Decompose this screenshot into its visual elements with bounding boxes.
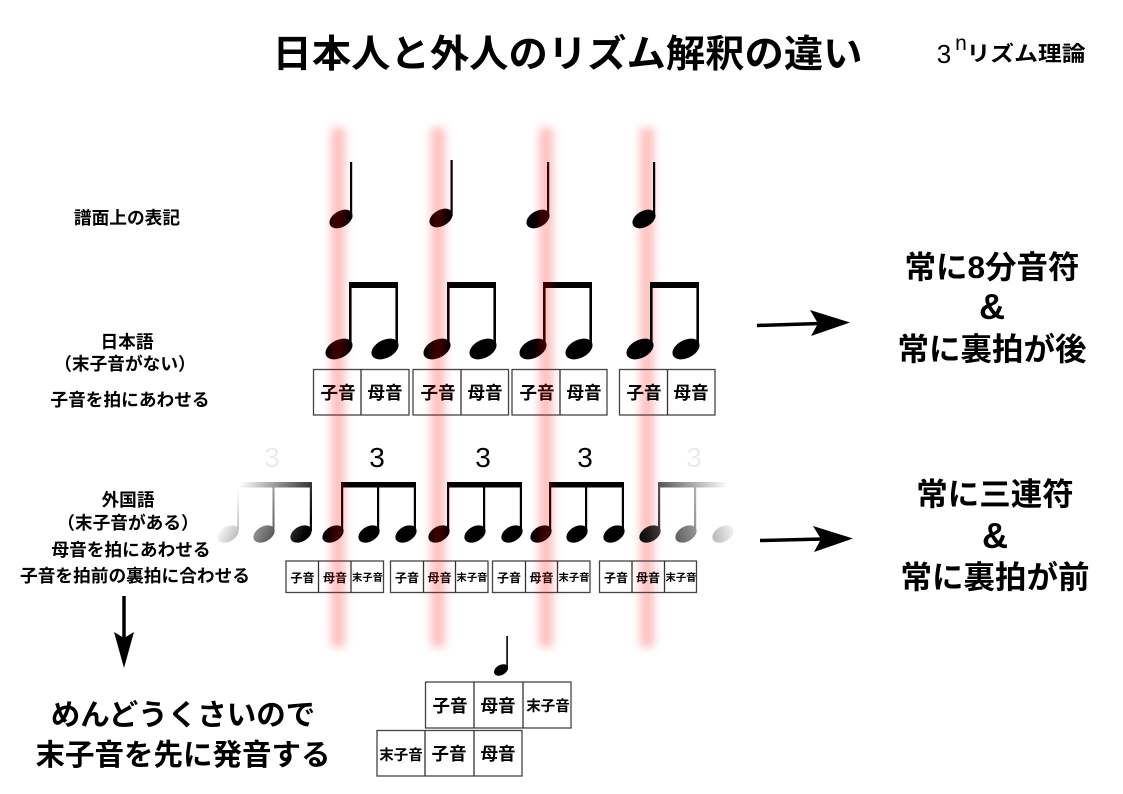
label: notation on score: 譜面上の表記 xyxy=(74,208,180,228)
syllable boxes: foreign languages: 末子音 xyxy=(559,571,589,584)
syllable boxes: Japanese: 子音 xyxy=(520,383,554,403)
syllable boxes: foreign languages: 末子音 xyxy=(666,571,696,584)
syllable boxes: foreign languages: 子音 xyxy=(395,570,419,585)
conclusion: pronounce final consonant first: 末子音を先に発音する xyxy=(35,739,331,772)
conclusion: pronounce final consonant first xyxy=(35,699,331,772)
label: Japanese xyxy=(50,332,210,410)
arrow: foreign to conclusion xyxy=(760,526,853,552)
red beat line 2 xyxy=(431,128,445,647)
syllable boxes: Japanese: 母音 xyxy=(566,383,602,403)
syllable boxes: foreign languages: 子音 xyxy=(290,570,315,585)
triplet number 3s: 3 xyxy=(264,442,280,473)
syllable boxes: Japanese: 子音 xyxy=(320,383,356,403)
triplet number 3s: 3 xyxy=(686,442,702,473)
subtitle: 3^n rhythm theory: n xyxy=(955,32,967,55)
red beat line 3 xyxy=(539,128,553,647)
arrow: down to pronunciation conclusion xyxy=(114,596,134,668)
syllable shift boxes xyxy=(377,682,571,776)
syllable boxes: foreign languages: 母音 xyxy=(636,570,660,585)
syllable boxes: foreign languages: 末子音 xyxy=(457,571,487,584)
conclusion: foreign languages: 常に三連符 xyxy=(916,476,1074,512)
conclusion: Japanese: 常に裏拍が後 xyxy=(897,331,1087,367)
label: Japanese: 日本語 xyxy=(100,332,154,352)
syllable shift boxes: 母音 xyxy=(480,696,516,716)
faded triplet notes left xyxy=(218,482,312,543)
syllable boxes: Japanese: 子音 xyxy=(420,383,456,403)
conclusion: Japanese: 常に8分音符 xyxy=(904,249,1080,285)
label: foreign languages: 子音を拍前の裏拍に合わせる xyxy=(20,566,250,586)
conclusion: pronounce final consonant first: めんどうくさいので xyxy=(51,699,315,732)
syllable shift boxes: 末子音 xyxy=(526,697,570,715)
label: foreign languages: 外国語 xyxy=(101,490,155,510)
syllable boxes: Japanese xyxy=(314,370,715,415)
syllable boxes: Japanese: 母音 xyxy=(468,383,502,403)
syllable boxes: foreign languages xyxy=(286,561,696,592)
conclusion: foreign languages: 常に裏拍が前 xyxy=(900,559,1090,595)
syllable boxes: Japanese: 母音 xyxy=(368,383,402,403)
syllable boxes: Japanese: 母音 xyxy=(674,383,708,403)
title: 日本人と外人のリズム解釈の違い xyxy=(272,33,862,76)
subtitle: 3^n rhythm theory: 3 xyxy=(937,39,951,69)
arrow: Japanese to conclusion xyxy=(757,310,850,336)
triplet number 3s: 3 xyxy=(577,442,593,473)
label: Japanese: （末子音がない） xyxy=(54,353,196,374)
conclusion: foreign languages xyxy=(900,476,1090,595)
triplet notes row xyxy=(319,482,628,546)
red beat line 1 xyxy=(331,128,345,647)
label: foreign languages xyxy=(20,490,250,586)
syllable boxes: foreign languages: 母音 xyxy=(323,570,347,585)
triplet number 3s xyxy=(264,442,702,473)
syllable boxes: foreign languages: 子音 xyxy=(497,570,521,585)
syllable shift boxes: 母音 xyxy=(480,744,516,764)
conclusion: foreign languages: & xyxy=(982,515,1008,556)
syllable shift boxes: 子音 xyxy=(432,744,466,764)
syllable boxes: foreign languages: 母音 xyxy=(529,570,554,585)
label: Japanese: 子音を拍にあわせる xyxy=(50,390,210,410)
syllable boxes: foreign languages: 母音 xyxy=(427,570,452,585)
conclusion: Japanese xyxy=(897,249,1087,367)
syllable boxes: foreign languages: 末子音 xyxy=(352,571,383,584)
eighth notes row xyxy=(322,282,703,364)
subtitle: 3^n rhythm theory: リズム理論 xyxy=(966,42,1086,66)
label: foreign languages: （末子音がある） xyxy=(57,512,199,533)
label: foreign languages: 母音を拍にあわせる xyxy=(51,540,211,560)
syllable boxes: Japanese: 子音 xyxy=(626,383,662,403)
red beat line 4 xyxy=(640,128,654,647)
triplet number 3s: 3 xyxy=(475,442,491,473)
triplet number 3s: 3 xyxy=(369,442,385,473)
syllable boxes: foreign languages: 子音 xyxy=(604,570,628,585)
syllable shift boxes: 末子音 xyxy=(379,746,423,764)
quarter notes row xyxy=(326,160,659,232)
small quarter note xyxy=(492,636,510,678)
subtitle: 3^n rhythm theory xyxy=(937,32,1086,69)
syllable shift boxes: 子音 xyxy=(432,696,468,716)
faded triplet notes right xyxy=(639,482,734,543)
conclusion: Japanese: & xyxy=(979,286,1005,327)
